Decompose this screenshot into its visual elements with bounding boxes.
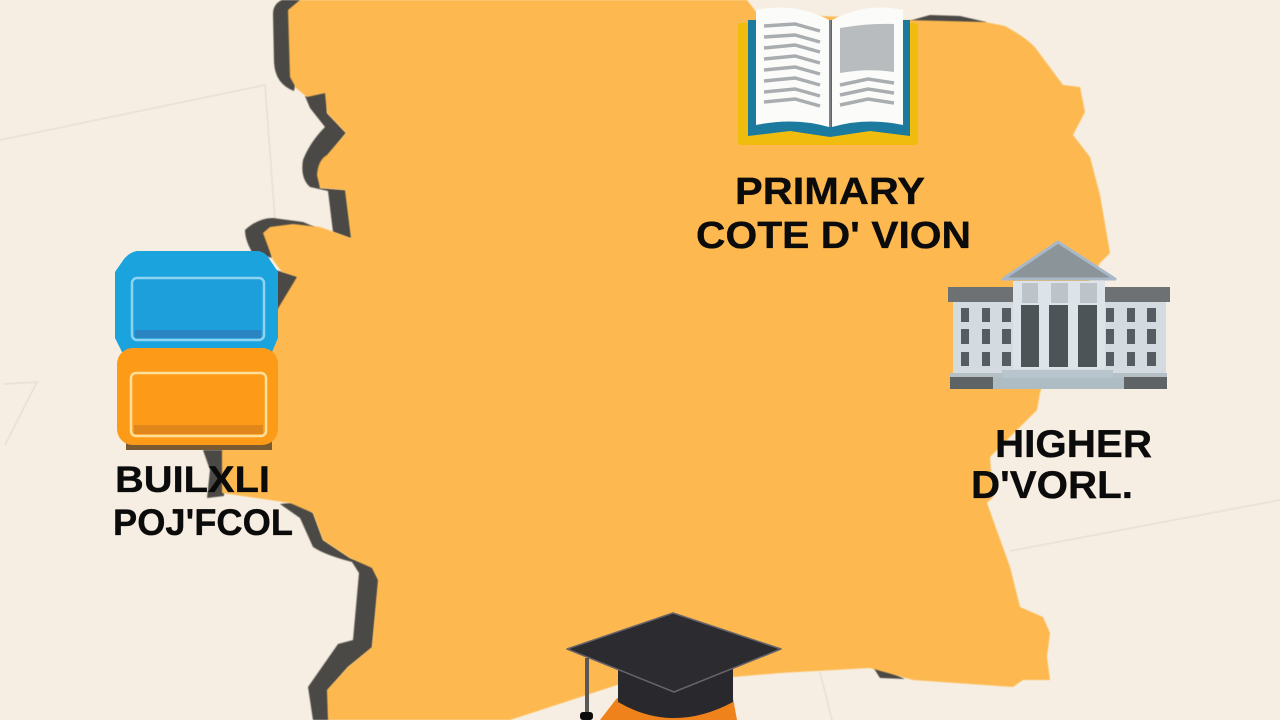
label: building bbox=[113, 459, 293, 543]
label: building: BUILXLI bbox=[115, 459, 270, 500]
icon: blue block bbox=[115, 251, 278, 352]
icon: open book bbox=[738, 8, 918, 145]
label: primary: PRIMARY bbox=[735, 171, 925, 213]
label: primary bbox=[696, 171, 971, 257]
label: primary: COTE D' VION bbox=[696, 215, 971, 257]
map shadow outline bbox=[203, 0, 986, 720]
label: building: POJ'FCOL bbox=[113, 502, 293, 543]
label: higher: D'VORL. bbox=[971, 464, 1133, 507]
icon: university building bbox=[948, 242, 1170, 389]
map of Côte d'Ivoire bbox=[222, 0, 1110, 720]
label: higher: HIGHER bbox=[995, 423, 1152, 466]
label: higher bbox=[971, 423, 1152, 507]
icon: graduation cap bbox=[567, 613, 781, 720]
icon: orange block bbox=[117, 348, 278, 450]
